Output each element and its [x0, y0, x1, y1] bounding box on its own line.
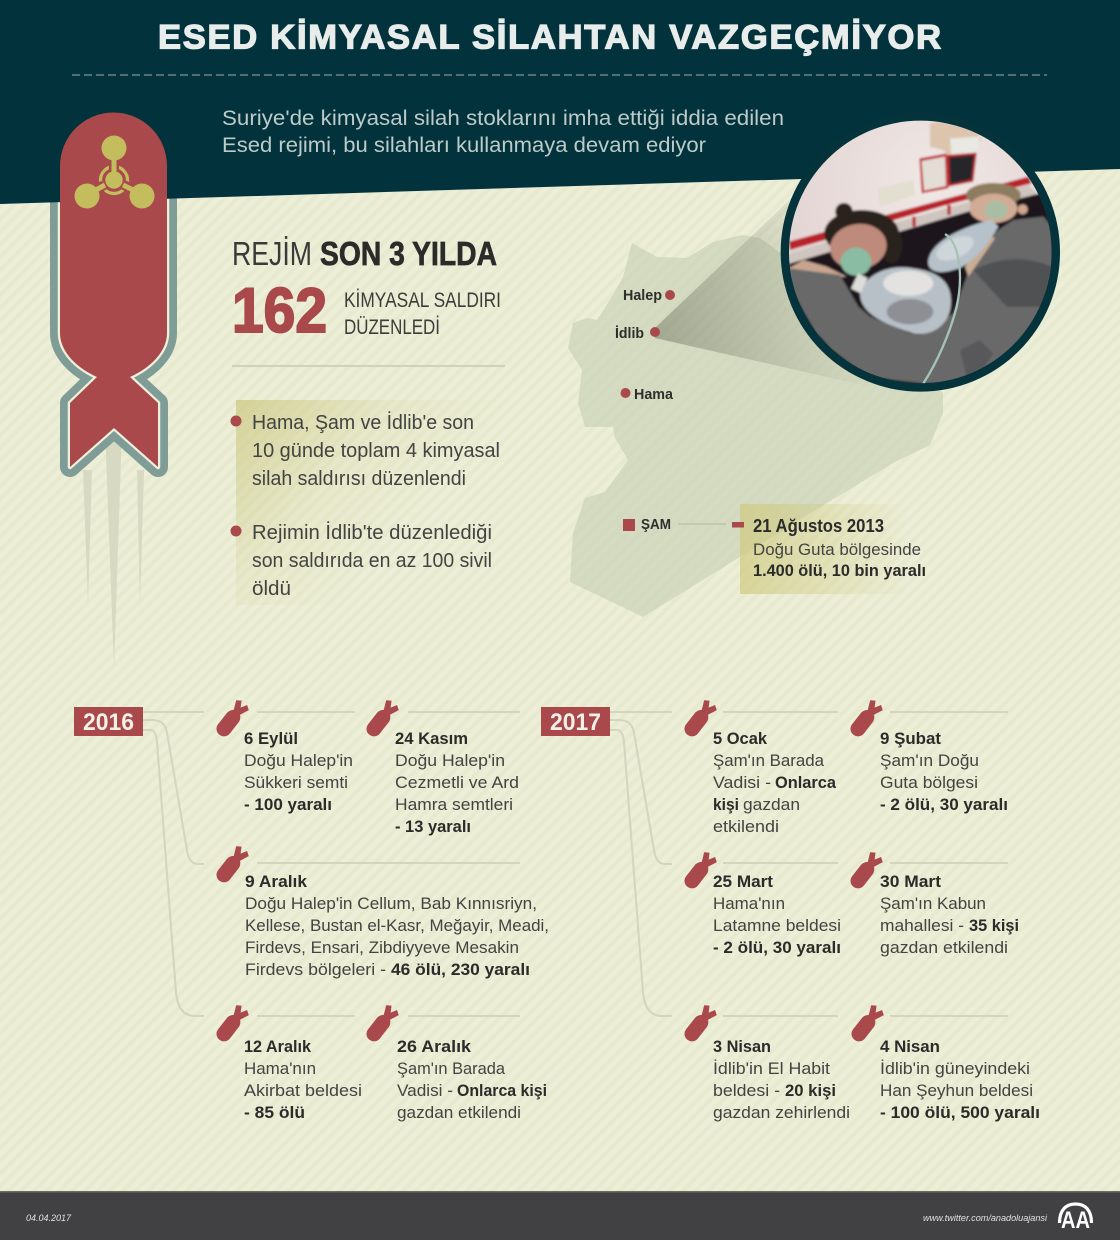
event: 3 Nisan [681, 1003, 850, 1122]
timeline connectors [143, 712, 1008, 1016]
event: 9 Subat: Şam'ın Doğu [880, 751, 979, 770]
label: Halep: Halep [623, 288, 662, 304]
header band [0, 0, 1120, 204]
event: 9 Subat: Guta bölgesi [880, 773, 978, 792]
event: 5 Ocak: etkilendi [713, 817, 779, 836]
callout: 21 August 2013: 1.400 ölü, 10 bin yaralı [753, 562, 926, 580]
event: 4 Nisan: - 100 ölü, 500 yaralı [880, 1103, 1040, 1122]
icon: bomb [213, 1003, 251, 1045]
bullet: idlib attack: öldü [252, 578, 291, 600]
event: 9 Subat: 9 Şubat [880, 729, 941, 748]
event: 30 Mart: 30 Mart [880, 872, 941, 891]
icon: bomb [848, 1003, 886, 1045]
big number: 162 attacks: DÜZENLEDİ [344, 316, 440, 339]
event: 9 Aralik: 46 ölü, 230 yaralı [391, 960, 530, 979]
title: ESED KİMYASAL SİLAHTAN VAZGEÇMİYOR [158, 18, 941, 56]
event: 24 Kasim: 24 Kasım [395, 729, 468, 748]
event: 3 Nisan: İdlib'in El Habit [713, 1059, 830, 1078]
event: 25 Mart [681, 850, 841, 957]
icon: chemical weapon symbol [74, 136, 154, 208]
event: 25 Mart: Hama'nın [713, 894, 785, 913]
event: 5 Ocak: gazdan [743, 795, 800, 814]
event: 6 Eylul: - 100 yaralı [244, 795, 332, 814]
event: 4 Nisan [848, 1003, 1040, 1122]
subtitle: Esed rejimi, bu silahları kullanmaya devam ediyor [222, 133, 706, 157]
event: 26 Aralik: 26 Aralık [397, 1037, 472, 1056]
icon: bomb [363, 1003, 401, 1045]
date: 04.04.2017 [26, 1213, 72, 1223]
icon: bomb [847, 850, 885, 892]
event: 30 Mart: mahallesi - [880, 916, 964, 935]
icon: bomb [213, 698, 251, 740]
event: 25 Mart: 25 Mart [713, 872, 773, 891]
event: 26 Aralik: Onlarca kişi [457, 1081, 547, 1100]
label: Sam [623, 517, 671, 533]
event: 3 Nisan: beldesi - [713, 1081, 780, 1100]
event: 4 Nisan: 4 Nisan [880, 1037, 940, 1056]
event: 24 Kasim: Hamra semtleri [395, 795, 513, 814]
event: 5 Ocak [681, 698, 837, 836]
event: 5 Ocak: kişi [713, 795, 739, 814]
event: 12 Aralik: - 85 ölü [244, 1103, 305, 1122]
event: 26 Aralik: gazdan etkilendi [397, 1103, 521, 1122]
event: 24 Kasim: Cezmetli ve Ard [395, 773, 519, 792]
label: Idlib [615, 325, 660, 342]
event: 5 Ocak: Onlarca [775, 773, 837, 792]
event: 25 Mart: Latamne beldesi [713, 916, 841, 935]
callout: 21 August 2013 [732, 504, 926, 594]
event: 30 Mart: 35 kişi [969, 916, 1019, 935]
event: 6 Eylul [213, 698, 353, 814]
event: 3 Nisan: gazdan zehirlendi [713, 1103, 850, 1122]
bullet: idlib attack: Rejimin İdlib'te düzenlediği [252, 521, 492, 544]
event: 9 Subat: - 2 ölü, 30 yaralı [880, 795, 1008, 814]
big number: 162 attacks: 162 [232, 276, 327, 346]
event: 12 Aralik: Hama'nın [244, 1059, 316, 1078]
label: Idlib: İdlib [615, 325, 644, 342]
bullet: 10 days [230, 411, 500, 490]
icon: bomb [363, 698, 401, 740]
logo: AA: AA [1061, 1207, 1090, 1234]
light beam from Idlib [655, 190, 880, 389]
footer [0, 1191, 1120, 1240]
event: 24 Kasim: - 13 yaralı [395, 817, 471, 836]
event: 6 Eylul: 6 Eylül [244, 729, 298, 748]
big number: 162 attacks: KİMYASAL SALDIRI [344, 289, 501, 312]
heading: rejim son 3 yilda: REJİM [232, 235, 312, 272]
callout: 21 August 2013: Doğu Guta bölgesinde [753, 541, 921, 559]
photo: children with oxygen masks [780, 112, 1060, 393]
event: 26 Aralik: Vadisi - [397, 1081, 453, 1100]
event: 9 Aralik: Doğu Halep'in Cellum, Bab Kınnısriyn, [245, 894, 537, 913]
event: 3 Nisan: 20 kişi [785, 1081, 836, 1100]
event: 12 Aralik: 12 Aralık [244, 1037, 312, 1056]
event: 9 Aralik: Kellese, Bustan el-Kasr, Meğayir, Meadi, [245, 916, 549, 935]
event: 12 Aralik: Akirbat beldesi [244, 1081, 362, 1100]
event: 6 Eylul: Sükkeri semti [244, 773, 348, 792]
event: 26 Aralik: Şam'ın Barada [397, 1059, 506, 1078]
icon: bomb [213, 844, 251, 886]
heading: rejim son 3 yilda [232, 235, 497, 272]
icon: bomb [681, 850, 719, 892]
event: 3 Nisan: 3 Nisan [713, 1037, 771, 1056]
label: Sam: ŞAM [641, 517, 671, 533]
bullet: 10 days: silah saldırısı düzenlendi [252, 468, 466, 490]
event: 25 Mart: - 2 ölü, 30 yaralı [713, 938, 841, 957]
event: 5 Ocak: Şam'ın Barada [713, 751, 825, 770]
event: 5 Ocak: Vadisi - [713, 773, 771, 792]
icon: bomb [847, 698, 885, 740]
event: 9 Aralik [213, 844, 549, 979]
icon: bomb with chemical symbol [60, 112, 167, 467]
map of Syria [568, 190, 943, 617]
event: 12 Aralik [213, 1003, 362, 1122]
event: 9 Aralik: 9 Aralık [245, 872, 308, 891]
event: 30 Mart: Şam'ın Kabun [880, 894, 986, 913]
event: 30 Mart [847, 850, 1019, 957]
event: 4 Nisan: İdlib'in güneyindeki [880, 1059, 1030, 1078]
icon: bomb [681, 1003, 719, 1045]
event: 30 Mart: gazdan etkilendi [880, 938, 1008, 957]
event: 6 Eylul: Doğu Halep'in [244, 751, 353, 770]
heading: rejim son 3 yilda: SON 3 YILDA [320, 235, 497, 272]
event: 24 Kasim [363, 698, 519, 836]
icon: bomb [681, 698, 719, 740]
bullet: 10 days: 10 günde toplam 4 kimyasal [252, 440, 500, 462]
event: 26 Aralik [363, 1003, 547, 1122]
event: 9 Aralik: Firdevs, Ensari, Zibdiyyeve Mesakin [245, 938, 519, 957]
event: 9 Subat [847, 698, 1008, 814]
icon: bomb trails [83, 428, 144, 668]
event: 4 Nisan: Han Şeyhun beldesi [880, 1081, 1033, 1100]
event: 24 Kasim: Doğu Halep'in [395, 751, 505, 770]
bullet: 10 days: Hama, Şam ve İdlib'e son [252, 411, 474, 434]
callout: 21 August 2013: 21 Ağustos 2013 [753, 516, 884, 536]
twitter address: www.twitter.com/anadoluajansi [923, 1213, 1048, 1224]
event: 5 Ocak: 5 Ocak [713, 729, 768, 748]
bullet highlight panel [236, 400, 514, 605]
year label: 2017: 2017 [550, 709, 601, 736]
bullet: idlib attack [230, 521, 492, 600]
label: Hama: Hama [634, 387, 674, 403]
bullet: idlib attack: son saldırıda en az 100 sivil [252, 550, 492, 572]
event: 9 Aralik: Firdevs bölgeleri - [245, 960, 386, 979]
big number: 162 attacks [232, 276, 501, 346]
bomb outline [60, 112, 167, 467]
subtitle: Suriye'de kimyasal silah stoklarını imha ettiği iddia edilen [222, 106, 784, 130]
subtitle [222, 106, 784, 157]
year label: 2016: 2016 [83, 709, 134, 736]
